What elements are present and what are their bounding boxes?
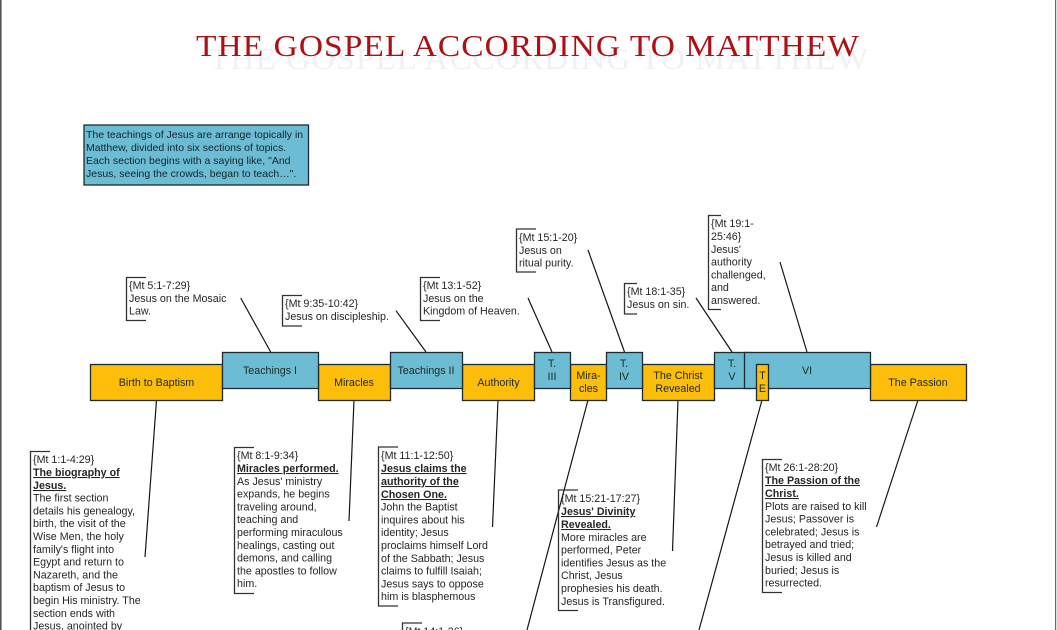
callout: Mt 11:1-12:50: Jesus claims the (381, 463, 467, 475)
callout: Mt 19:1-25:46: answered. (711, 295, 760, 307)
callout: Mt 11:1-12:50: Jesus says to oppose (381, 578, 484, 590)
callout: Mt 8:1-9:34: expands, he begins (237, 488, 330, 500)
callout: Mt 15:21-17:27: identifies Jesus as the (561, 558, 666, 570)
section: Teachings I: Teachings I (243, 365, 297, 377)
callout: Mt 5:1-7:29: Law. (129, 306, 151, 318)
section: Miracles 2: Mira- (576, 370, 601, 382)
section: Authority (462, 364, 534, 400)
callout: Mt 15:21-17:27: Revealed. (561, 519, 611, 531)
callout: Mt 19:1-25:46: 25:46} (711, 231, 742, 243)
title with drop shadow (196, 28, 869, 76)
callout: Mt 15:21-17:27: performed, Peter (561, 544, 642, 556)
intro note: The teachings of Jesus are arrange topically in (86, 129, 303, 141)
callout: Mt 8:1-9:34: As Jesus' ministry (237, 476, 323, 488)
callout: Mt 9:35-10:42: {Mt 9:35-10:42} (285, 298, 359, 310)
callout: Mt 18:1-35 (624, 284, 689, 314)
callout: Mt 14:1-36 (402, 623, 464, 630)
callout: Mt 19:1-25:46: Jesus' (711, 244, 741, 256)
callout: Mt 1:1-4:29: baptism of Jesus to (33, 582, 125, 594)
callout: Mt 9:35-10:42: Jesus on discipleship. (285, 311, 389, 323)
section: T. V: V (728, 371, 736, 383)
section: VI (744, 352, 870, 388)
callout: Mt 26:1-28:20: celebrated; Jesus is (765, 526, 859, 538)
callout: Mt 11:1-12:50 (378, 447, 488, 606)
callout: Mt 1:1-4:29: family's flight into (33, 544, 114, 556)
callout: Mt 15:21-17:27 (558, 490, 666, 610)
callout: Mt 8:1-9:34: the apostles to follow (237, 566, 337, 578)
callout: Mt 8:1-9:34: healings, casting out (237, 540, 334, 552)
section: VI: VI (802, 365, 812, 377)
callout: Mt 11:1-12:50: {Mt 11:1-12:50} (381, 450, 454, 462)
section: The Passion: The Passion (888, 377, 948, 389)
section: T. III: T. (548, 358, 556, 370)
callout: Mt 26:1-28:20: The Passion of the (765, 475, 860, 487)
section: Miracles: Miracles (334, 377, 374, 389)
intro note (84, 125, 308, 185)
callout: Mt 5:1-7:29 (126, 278, 227, 320)
callout: Mt 15:1-20: Jesus on (519, 245, 562, 257)
callout: Mt 1:1-4:29: Wise Men, the holy (33, 531, 125, 543)
callout: Mt 15:21-17:27: Christ, Jesus (561, 570, 623, 582)
callout: Mt 8:1-9:34: demons, and calling (237, 552, 332, 564)
callout: Mt 11:1-12:50: him is blasphemous (381, 591, 475, 603)
callout: Mt 26:1-28:20: buried; Jesus is (765, 565, 839, 577)
callout: Mt 8:1-9:34: teaching and (237, 514, 298, 526)
callout: Mt 11:1-12:50: proclaims himself Lord (381, 540, 488, 552)
section: T. V: T. (728, 358, 736, 370)
callout: Mt 11:1-12:50: John the Baptist (381, 502, 458, 514)
callout: Mt 1:1-4:29: The biography of (33, 467, 120, 479)
callout: Mt 8:1-9:34: performing miraculous (237, 527, 343, 539)
section: Miracles (318, 364, 390, 400)
callout: Mt 26:1-28:20: Christ. (765, 488, 799, 500)
callout: Mt 15:21-17:27: prophesies his death. (561, 583, 663, 595)
section: Authority: Authority (477, 377, 520, 389)
section: The Passion (870, 364, 966, 400)
title with drop shadow: THE GOSPEL ACCORDING TO MATTHEW (196, 28, 860, 63)
callout: Mt 26:1-28:20 (762, 460, 867, 592)
section: Teachings II: Teachings II (397, 365, 455, 377)
callout: Mt 13:1-52: Jesus on the (423, 293, 484, 305)
callout: Mt 11:1-12:50: authority of the (381, 476, 459, 488)
callout: Mt 1:1-4:29: birth, the visit of the (33, 518, 126, 530)
callout: Mt 1:1-4:29: {Mt 1:1-4:29} (33, 454, 95, 466)
callout: Mt 1:1-4:29: section ends with (33, 608, 115, 620)
callout: Mt 1:1-4:29: begin His ministry. The (33, 595, 141, 607)
callout: Mt 13:1-52: {Mt 13:1-52} (423, 280, 482, 292)
callout: Mt 13:1-52: Kingdom of Heaven. (423, 306, 520, 318)
section: T. III (534, 352, 570, 388)
callout: Mt 18:1-35: Jesus on sin. (627, 299, 689, 311)
callout: Mt 26:1-28:20: Jesus is killed and (765, 552, 852, 564)
section: Miracles 2: cles (579, 383, 598, 395)
callout: Mt 5:1-7:29: {Mt 5:1-7:29} (129, 280, 191, 292)
callout: Mt 26:1-28:20: Jesus; Passover is (765, 514, 854, 526)
callout: Mt 15:21-17:27: {Mt 15:21-17:27} (561, 493, 640, 505)
callout: Mt 1:1-4:29: Egypt and return to (33, 556, 124, 568)
callout: Mt 19:1-25:46: {Mt 19:1- (711, 218, 754, 230)
section: Teachings II (390, 352, 462, 388)
callout: Mt 5:1-7:29: Jesus on the Mosaic (129, 293, 227, 305)
callout: Mt 11:1-12:50: inquires about his (381, 514, 465, 526)
connector lines (145, 250, 918, 630)
callout: Mt 8:1-9:34: Miracles performed. (237, 463, 339, 475)
section: T. IV (606, 352, 642, 388)
intro note: Matthew, divided into six sections of topics. (86, 142, 286, 154)
section: Teachings I (222, 352, 318, 388)
callout: Mt 26:1-28:20: {Mt 26:1-28:20} (765, 462, 839, 474)
callout: Mt 26:1-28:20: betrayed and tried; (765, 539, 854, 551)
callout: Mt 9:35-10:42 (282, 296, 389, 326)
section: T. III: III (548, 371, 556, 383)
callout: Mt 15:21-17:27: Jesus is Transfigured. (561, 596, 665, 608)
callout: Mt 11:1-12:50: identity; Jesus (381, 527, 449, 539)
callout: Mt 1:1-4:29 (30, 452, 141, 630)
section: T. IV: IV (619, 371, 630, 383)
callout: Mt 11:1-12:50: Chosen One. (381, 489, 447, 501)
callout: Mt 18:1-35: {Mt 18:1-35} (627, 286, 686, 298)
callout: Mt 11:1-12:50: claims to fulfill Isaiah; (381, 566, 482, 578)
callout: Mt 19:1-25:46: challenged, (711, 270, 766, 282)
section: T. V (714, 352, 750, 388)
timeline bar (90, 352, 966, 400)
section: T E: T (759, 370, 766, 382)
callout: Mt 26:1-28:20: resurrected. (765, 578, 822, 590)
callout: Mt 15:21-17:27: Jesus' Divinity (561, 506, 635, 518)
callout: Mt 1:1-4:29: details his genealogy, (33, 506, 135, 518)
intro note: Each section begins with a saying like, "And (86, 155, 291, 167)
callout: Mt 15:1-20 (516, 229, 578, 272)
callout: Mt 8:1-9:34 (234, 448, 343, 594)
callout: Mt 8:1-9:34: him. (237, 578, 257, 590)
section: The Christ Revealed (642, 364, 714, 400)
callout: Mt 26:1-28:20: Plots are raised to kill (765, 501, 867, 513)
callout: Mt 15:1-20: {Mt 15:1-20} (519, 232, 578, 244)
section: Birth to Baptism: Birth to Baptism (119, 377, 194, 389)
section: T E (756, 364, 768, 400)
callout: Mt 1:1-4:29: Jesus. (33, 480, 66, 492)
callout: Mt 19:1-25:46: authority (711, 256, 753, 268)
callout: Mt 15:21-17:27: More miracles are (561, 532, 647, 544)
callout: Mt 11:1-12:50: of the Sabbath; Jesus (381, 553, 484, 565)
section: The Christ Revealed: Revealed (655, 383, 701, 395)
title with drop shadow: THE GOSPEL ACCORDING TO MATTHEW (209, 41, 869, 76)
callout: Mt 8:1-9:34: {Mt 8:1-9:34} (237, 450, 299, 462)
callout: Mt 15:1-20: ritual purity. (519, 258, 573, 270)
intro note: Jesus, seeing the crowds, began to teach…". (86, 168, 296, 180)
callout: Mt 1:1-4:29: Nazareth, and the (33, 570, 118, 582)
section: Birth to Baptism (90, 364, 222, 400)
callout: Mt 19:1-25:46: and (711, 282, 729, 294)
section: T. IV: T. (620, 358, 628, 370)
section: Miracles 2 (570, 364, 606, 400)
callout: Mt 8:1-9:34: traveling around, (237, 502, 317, 514)
callout: Mt 13:1-52 (420, 278, 520, 320)
section: The Christ Revealed: The Christ (653, 370, 703, 382)
section: T E: E (759, 383, 766, 395)
callout: Mt 19:1-25:46 (708, 216, 766, 310)
callout: Mt 1:1-4:29: The first section (33, 492, 108, 504)
